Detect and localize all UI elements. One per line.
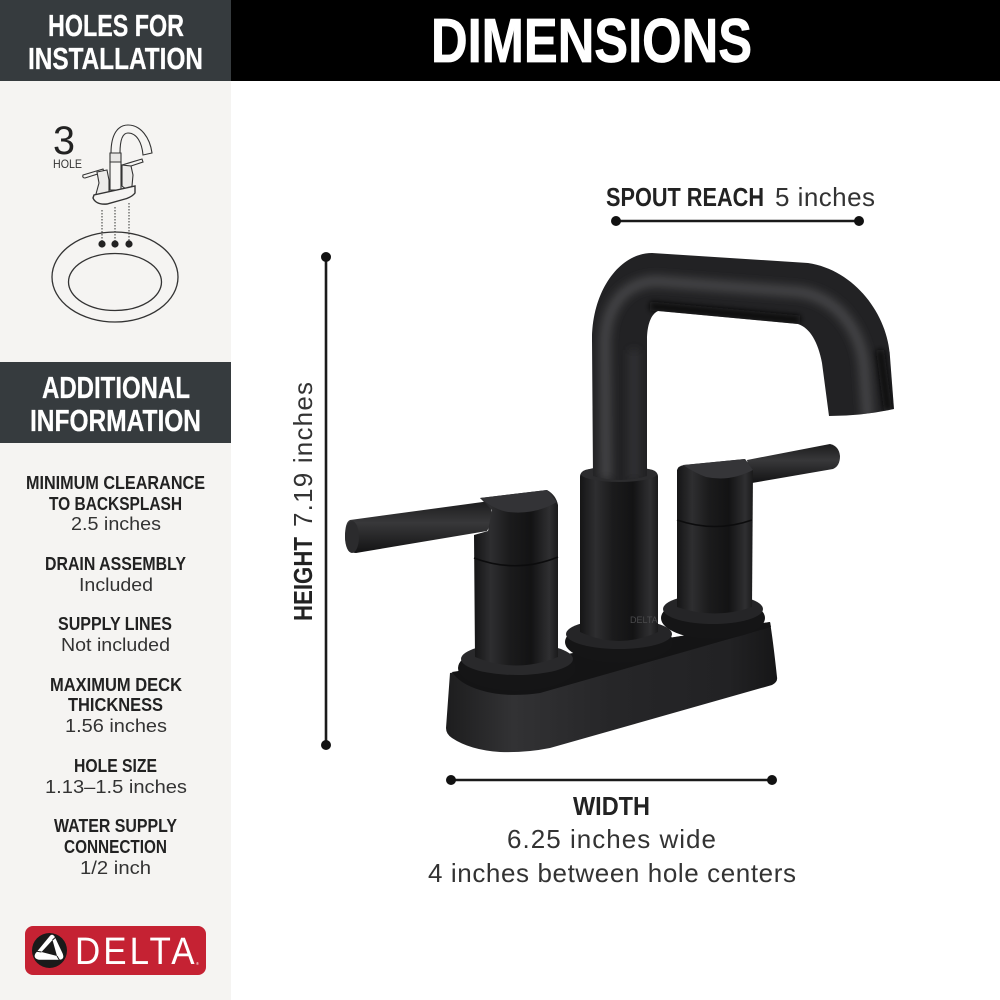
center body: DELTA	[630, 615, 658, 625]
spec: minimum clearance	[26, 473, 205, 534]
spec: water supply connection	[54, 816, 177, 878]
spec: supply lines	[58, 614, 172, 655]
dimension: width: 6.25 inches wide	[507, 824, 716, 854]
dimension: width: 4 inches between hole centers	[428, 858, 796, 888]
spec: hole size	[45, 756, 187, 797]
spec: drain assembly: DRAIN ASSEMBLY	[45, 554, 186, 574]
header: additional information: INFORMATION	[30, 403, 201, 438]
logo: delta: DELTA	[75, 930, 195, 972]
header: additional information	[0, 362, 231, 443]
spec: hole size: HOLE SIZE	[74, 756, 157, 776]
header: holes for installation: HOLES FOR	[48, 8, 184, 43]
dimension: width: WIDTH	[573, 791, 650, 821]
faucet spout	[592, 253, 894, 480]
title banner: dimensions	[231, 0, 1000, 81]
spec: maximum deck thickness: 1.56 inches	[65, 716, 167, 736]
spec: water supply connection: CONNECTION	[64, 837, 167, 857]
dimension: height: 7.19 inches	[288, 382, 318, 527]
left handle	[345, 490, 576, 691]
dimension: height	[288, 252, 331, 750]
icon: 3 hole installation diagram: 3	[53, 119, 75, 163]
spec: minimum clearance: 2.5 inches	[71, 514, 161, 534]
dimension: spout reach: SPOUT REACH	[606, 182, 764, 212]
header: holes for installation: INSTALLATION	[28, 41, 203, 76]
spec: water supply connection: WATER SUPPLY	[54, 816, 177, 836]
logo: delta	[25, 926, 206, 975]
icon: 3 hole installation diagram: HOLE	[53, 157, 82, 171]
spec: hole size: 1.13–1.5 inches	[45, 777, 187, 797]
spec: minimum clearance: MINIMUM CLEARANCE	[26, 473, 205, 493]
deck plate	[446, 622, 777, 752]
spec: supply lines: Not included	[61, 635, 170, 655]
right handle	[661, 444, 840, 639]
spec: drain assembly	[45, 554, 186, 595]
icon: 3 hole installation diagram	[52, 119, 178, 322]
product photo: matte black faucet	[345, 245, 900, 752]
spec: supply lines: SUPPLY LINES	[58, 614, 172, 634]
center body	[565, 466, 673, 663]
header: holes for installation	[0, 0, 231, 81]
dimension: spout reach	[606, 182, 875, 226]
side panel background	[0, 81, 231, 1000]
dimension: height: HEIGHT	[288, 537, 318, 621]
logo: delta: ®	[196, 961, 199, 966]
title banner: dimensions: DIMENSIONS	[431, 7, 752, 76]
dimension: spout reach: 5 inches	[775, 182, 875, 212]
spec: maximum deck thickness: THICKNESS	[68, 695, 163, 715]
spec: maximum deck thickness	[50, 675, 182, 736]
spec: water supply connection: 1/2 inch	[80, 858, 151, 878]
spec: drain assembly: Included	[79, 575, 153, 595]
spec: minimum clearance: TO BACKSPLASH	[49, 494, 182, 514]
spec: maximum deck thickness: MAXIMUM DECK	[50, 675, 182, 695]
header: additional information: ADDITIONAL	[42, 370, 190, 405]
dimension: width	[428, 775, 796, 888]
